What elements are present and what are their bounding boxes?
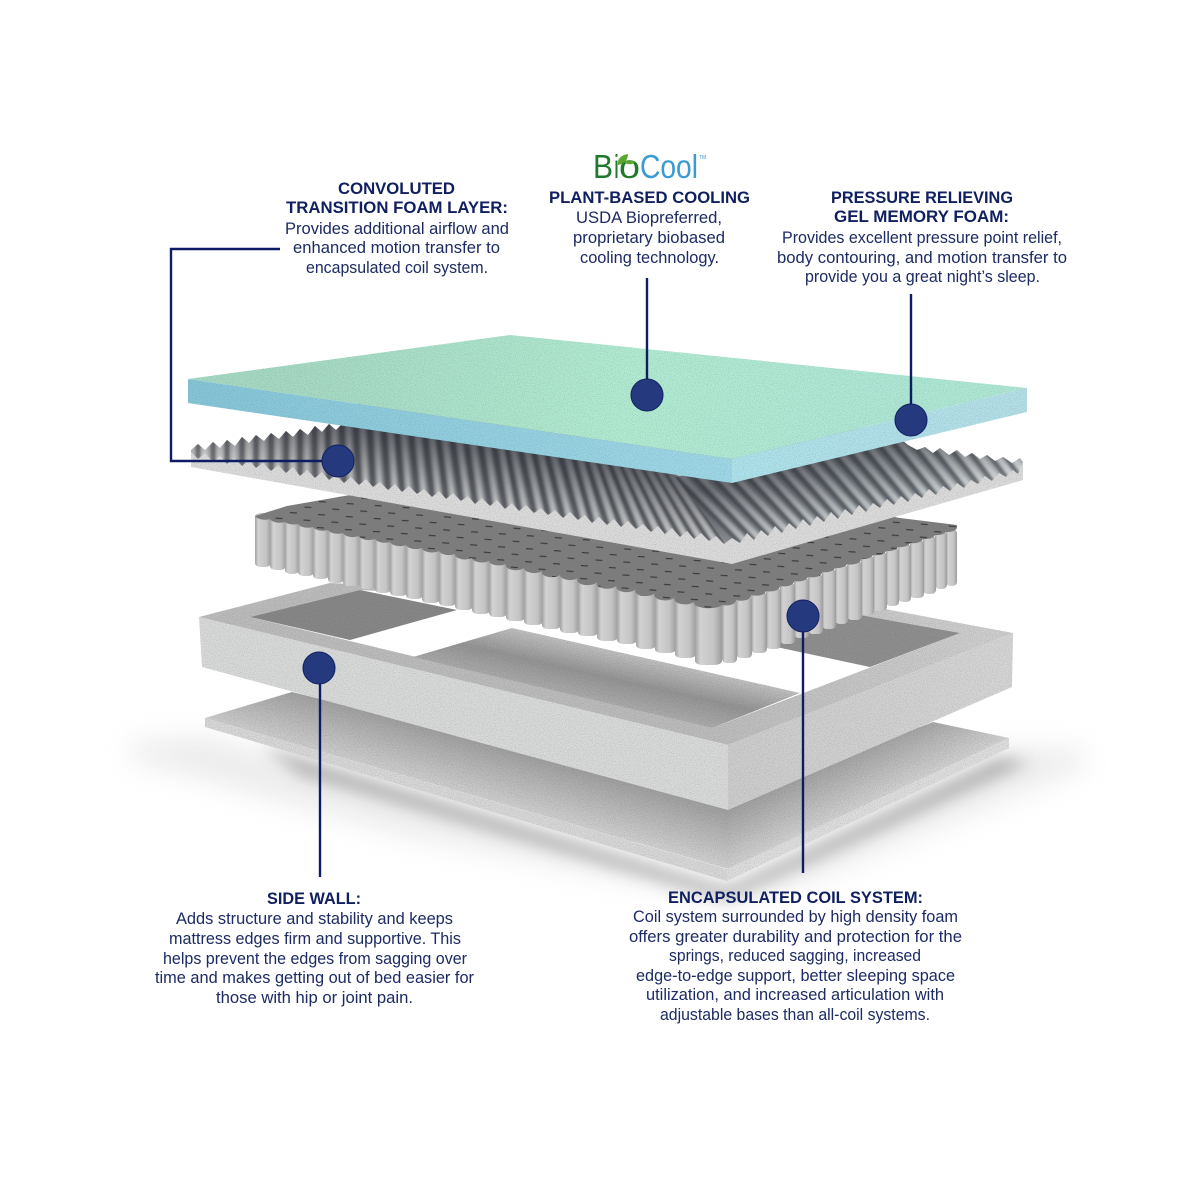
logo: BioCool	[593, 148, 706, 185]
text: encapsulated coil system	[629, 889, 962, 1024]
text: encapsulated coil system: adjustable bases than all-coil systems.	[660, 1006, 930, 1024]
text: gel memory foam: PRESSURE RELIEVING	[831, 189, 1013, 207]
text: gel memory foam: provide you a great night’s sleep.	[805, 268, 1040, 286]
text: side wall: those with hip or joint pain.	[216, 989, 413, 1007]
text: side wall: helps prevent the edges from sagging over	[163, 950, 467, 968]
text: encapsulated coil system: Coil system surrounded by high density foam	[633, 908, 958, 926]
text: gel memory foam	[777, 189, 1067, 286]
marker: cooling	[631, 379, 663, 411]
text: convoluted foam: enhanced motion transfer to	[293, 239, 500, 257]
infographic: mattress layers	[138, 154, 1078, 1024]
text: plant-based cooling: proprietary biobased	[573, 229, 725, 247]
logo: BioCool: Cool	[640, 148, 698, 185]
callout lines	[171, 249, 911, 877]
text: side wall: SIDE WALL:	[267, 890, 361, 908]
text: plant-based cooling: PLANT-BASED COOLING	[549, 189, 750, 207]
text: convoluted foam: TRANSITION FOAM LAYER:	[286, 199, 508, 217]
text: side wall	[155, 890, 474, 1007]
logo: BioCool: B	[593, 148, 613, 185]
text: encapsulated coil system: ENCAPSULATED COIL SYSTEM:	[668, 889, 923, 907]
logo: BioCool: TM	[699, 155, 706, 161]
text: side wall: time and makes getting out of bed easier for	[155, 969, 474, 987]
text: encapsulated coil system: utilization, and increased articulation with	[646, 986, 944, 1004]
marker: coil system	[787, 600, 819, 632]
text: side wall: Adds structure and stability and keeps	[176, 910, 453, 928]
floor shadow	[130, 735, 1085, 900]
text: plant-based cooling	[549, 189, 750, 267]
layer: gel memory foam	[188, 335, 1027, 483]
layer: convoluted foam	[188, 389, 1030, 564]
marker: gel memory foam	[895, 404, 927, 436]
logo: BioCool: o	[619, 148, 640, 185]
text: encapsulated coil system: edge-to-edge support, better sleeping space	[636, 967, 955, 985]
text: convoluted foam: encapsulated coil system.	[306, 259, 488, 277]
text: gel memory foam: Provides excellent pressure point relief,	[782, 229, 1062, 247]
text: plant-based cooling: cooling technology.	[580, 249, 719, 267]
logo: BioCool: i	[614, 148, 619, 185]
text: convoluted foam: Provides additional airflow and	[285, 220, 509, 238]
text: gel memory foam: GEL MEMORY FOAM:	[834, 208, 1009, 226]
text: encapsulated coil system: offers greater durability and protection for the	[629, 928, 962, 946]
text: encapsulated coil system: springs, reduced sagging, increased	[669, 947, 921, 965]
layer: encapsulated coils	[255, 495, 957, 665]
marker: side wall	[303, 652, 335, 684]
text: gel memory foam: body contouring, and motion transfer to	[777, 249, 1067, 267]
text: convoluted foam	[285, 180, 509, 277]
marker: convoluted foam	[322, 445, 354, 477]
layer: side wall frame	[199, 583, 1013, 810]
text: convoluted foam: CONVOLUTED	[338, 180, 455, 198]
text: plant-based cooling: USDA Biopreferred,	[576, 209, 722, 227]
layer: base foam plate	[205, 692, 1009, 881]
text: side wall: mattress edges firm and supportive. This	[169, 930, 461, 948]
